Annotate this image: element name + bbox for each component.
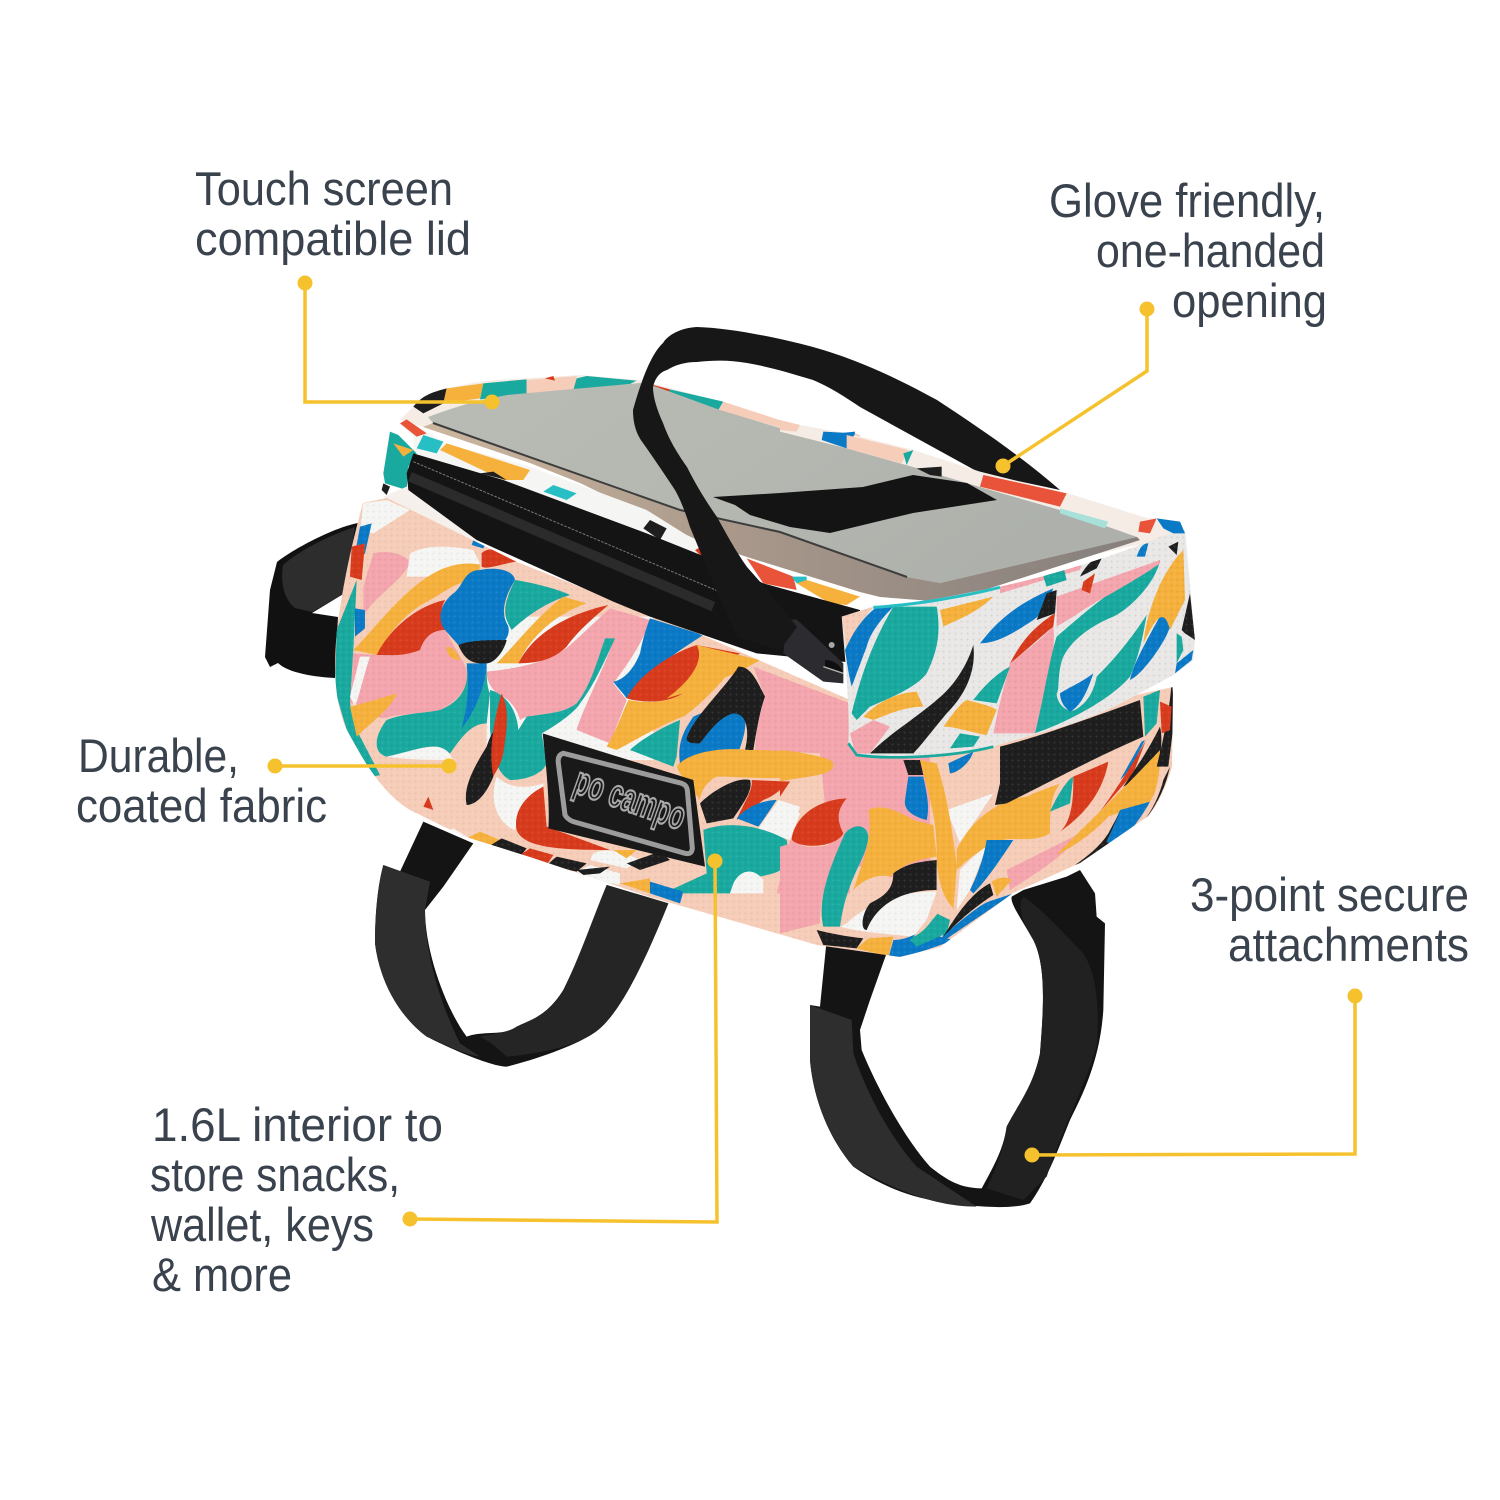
lower left strap [375,822,668,1067]
rim pattern, back left [413,376,860,450]
label text: store snacks, [150,1148,400,1201]
label text: attachments [1228,918,1469,971]
fabric gap fill under zipper [383,486,480,546]
top strap [633,327,1060,650]
label text: Durable, [78,729,239,782]
left loop strap [265,523,358,678]
callout: touch screen lid [195,162,500,410]
clear phone window [428,383,1137,583]
callout: secure attachments [1024,868,1469,1162]
lid rim and top base [400,375,1185,590]
leader line [1024,988,1362,1162]
label text: & more [152,1248,292,1301]
label text: Glove friendly, [1049,174,1325,227]
leader line [268,758,456,774]
label text: Touch screen [195,162,453,215]
brand patch [543,733,705,867]
front and side panel pattern, right part [780,680,1175,958]
front panel pattern, left part [335,500,930,893]
callout: durable fabric [76,729,456,832]
bag body [335,498,1173,957]
brand name: po campo [569,759,692,839]
label text: opening [1172,274,1327,327]
leader line [402,854,722,1226]
leader line [298,276,500,410]
phone edge [423,423,1140,602]
label text: 1.6L interior to [152,1098,443,1151]
infographic [78,170,1468,1292]
lower right strap [810,870,1105,1207]
label text: 3-point secure [1190,868,1469,921]
label text: coated fabric [76,779,327,832]
front flap [837,527,1200,763]
bottom trim stripes [447,828,683,903]
label text: compatible lid [195,212,471,265]
product: handlebar bag [265,327,1200,1207]
callout: interior capacity [150,854,722,1301]
label text: one-handed [1096,224,1325,277]
lid lower trim [382,419,860,605]
zipper [407,453,860,663]
zipper pull [783,619,843,683]
window reflection [713,475,997,533]
callout: glove friendly [996,174,1327,474]
rim over strap, right side [780,420,1185,533]
label text: wallet, keys [150,1198,374,1251]
leader line [996,302,1154,474]
